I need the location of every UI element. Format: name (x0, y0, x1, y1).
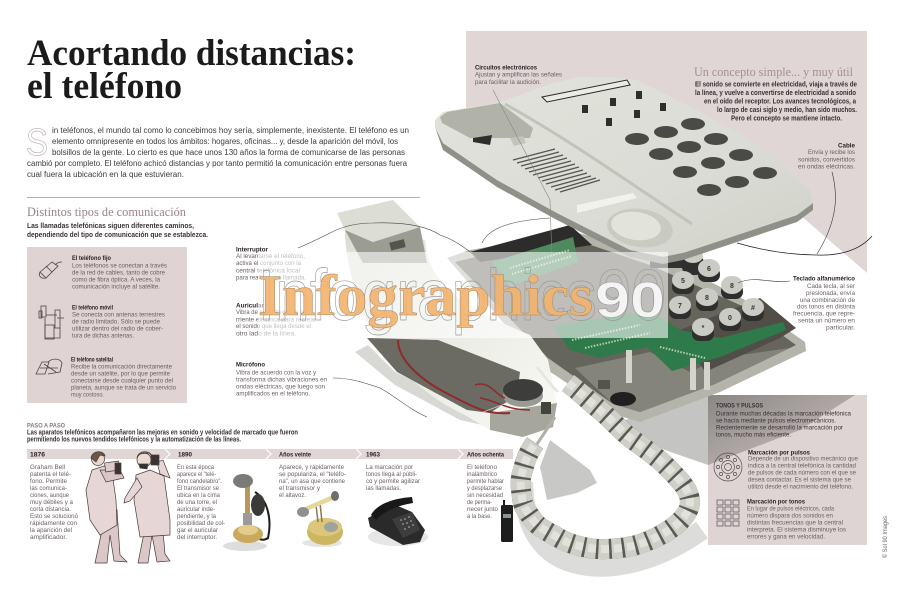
callout: circuitos electrónicos: para facilitar la audición. (475, 79, 541, 86)
text: 1876: fono. Permite (30, 478, 67, 485)
top shell (435, 77, 813, 264)
coiled cord (521, 383, 690, 549)
text: tone dialing: errores y gana en velocidad. (747, 534, 825, 540)
intro text block (26, 122, 409, 179)
text: satellite phone: muy costoso. (71, 392, 104, 398)
text: simple concept: la línea, y vuelve a convertirse de electricidad a sonido (695, 90, 856, 97)
callout: auricular (236, 302, 316, 338)
keypad buttons: 8 (730, 283, 734, 290)
text: landline: Los teléfonos se conectan a través (72, 262, 167, 270)
label strip (577, 193, 637, 213)
keypad buttons: 8 (705, 295, 709, 302)
callout: auricular: rriente eléctrica para recrear (236, 316, 316, 324)
icon: rotary dial (714, 453, 742, 481)
text: satellite phone: Recibe la comunicación directamente (71, 364, 172, 370)
intro text block: elemento omnipresente en todos los ámbitos: hogares, oficinas... y, desde la aparición del móvil, los (52, 137, 398, 146)
illustration: exploded telephone (337, 77, 813, 567)
man right (124, 452, 170, 563)
title: el teléfono (27, 65, 182, 106)
text: mobile: utilizar dentro del radio de cober- (72, 326, 163, 332)
text: landline: El teléfono fijo (72, 255, 111, 262)
callout: micrófono: Vibra de acuerdo con la voz y (236, 370, 317, 376)
text: satellite phone: conectarse desde cualquier punto del (71, 378, 173, 384)
callout: interruptor: Interruptor (236, 246, 268, 254)
ground shadows (355, 345, 708, 567)
callout: circuitos electrónicos: Circuitos electrónicos (475, 64, 537, 72)
callout: micrófono: amplificados en el teléfono. (236, 390, 310, 398)
function buttons (582, 91, 666, 126)
callout: teclado alfanumérico: Teclado alfanumérico (793, 276, 855, 282)
callout: teclado alfanumérico: senta un número en (798, 318, 856, 324)
illustration: 1920s telephone (297, 491, 343, 547)
callout: cable: en ondas eléctricas. (798, 164, 855, 170)
text: mobile: tura de dichas antenas. (72, 332, 134, 340)
text: tones and pulses: Recientemente se desarrolló la marcación por (716, 424, 843, 432)
subheading: types of communication: dependiendo del tipo de comunicación que se establezca. (27, 232, 208, 239)
text: 1963: La marcación por (366, 464, 413, 471)
watermark: Infographics (258, 263, 593, 328)
base tray (447, 225, 806, 422)
support column (650, 250, 695, 268)
intro text block: in teléfonos, el mundo tal como lo concebimos hoy sería, simplemente, inexistente. El teléfono es un (52, 126, 409, 135)
callout: circuitos electrónicos: Ajustan y amplifican las señales (475, 72, 562, 78)
text: 1876: la aparición del (30, 527, 72, 534)
dial keys (625, 118, 777, 196)
text: años ochenta: necer junto (467, 506, 498, 513)
speaker grille (513, 149, 600, 192)
text: landline (72, 255, 167, 290)
text: mobile (72, 304, 165, 340)
text: pulse dialing: de pulsos de cada número con el que se (748, 470, 856, 476)
text: 1890 (177, 464, 225, 541)
keypad buttons: * (702, 325, 705, 332)
callout: micrófono: Micrófono (236, 362, 265, 368)
callout: teclado alfanumérico: presionada, envía (806, 290, 855, 297)
text: 1876: las comunica- (30, 485, 67, 492)
text: landline: como de fibra óptica. A veces, la (72, 276, 160, 284)
handle button (605, 205, 675, 251)
callout: teclado alfanumérico: frecuencia, que repre- (793, 310, 855, 318)
microphone capsule (475, 367, 558, 414)
callout: teclado alfanumérico: una combinación de (800, 297, 855, 304)
text: simple concept: en el oído del receptor. Los avances tecnológicos, a (704, 98, 856, 106)
text: simple concept: Pero el concepto se mantiene intacto. (731, 116, 842, 122)
credit: © Sol 90 Images (882, 516, 889, 558)
text: pulse dialing: Depende de un dispositivo mecánico que (748, 456, 858, 462)
timeline band (27, 449, 513, 459)
callout: interruptor: central telefónica local (236, 268, 300, 274)
text: satellite phone: desde un satélite, por lo que permite (71, 370, 170, 378)
text: tones and pulses: se hacía mediante pulsos electromecánicos. (716, 418, 836, 424)
callout: interruptor: para realizar una llamada. (236, 274, 306, 282)
callout: teclado alfanumérico: Cada tecla, al ser (807, 283, 855, 290)
text: 1890: ubica en la cima (177, 492, 220, 499)
text: años veinte (279, 464, 346, 499)
timeline band: Años ochenta (467, 452, 504, 458)
text: 1963: tonos llega al públi- (366, 471, 417, 478)
text: 1876: muy débiles y a (30, 499, 73, 506)
keypad buttons (669, 249, 764, 341)
leader lines (298, 90, 872, 417)
text: 1876: patenta el telé- (30, 471, 71, 478)
callout: teclado alfanumérico: dos tonos en distinta (797, 304, 855, 310)
text: años ochenta: El teléfono (467, 464, 497, 471)
man left (86, 452, 127, 563)
text: 1876: ciones, aunque (30, 492, 69, 499)
callout: interruptor: Al levantarse el teléfono, (236, 253, 305, 260)
heading: types of communication: Distintos tipos de comunicación (27, 205, 187, 219)
text: mobile: Se conecta con antenas terrestres (72, 312, 165, 318)
text: 1876: rápidamente con (30, 520, 77, 527)
step by step intro: permitiendo los nuevos tendidos telefónicos y la automatización de las líneas. (27, 436, 241, 444)
step by step intro: PASO A PASO (27, 422, 65, 430)
text: mobile: El teléfono móvil (72, 304, 113, 312)
keypad buttons: 7 (678, 303, 682, 310)
title (27, 32, 356, 106)
text: 1876: Esto se solucionó (30, 513, 78, 520)
text: 1876: corta distancia. (30, 506, 71, 513)
callout: cable: Cable (838, 142, 855, 150)
text: tone dialing (747, 498, 846, 540)
text: 1963: las llamadas. (366, 485, 401, 492)
text: pulse dialing: Marcación por pulsos (748, 450, 810, 456)
text: años ochenta: a la base. (467, 513, 492, 520)
text: años ochenta: sin necesidad (467, 492, 503, 499)
keypad buttons: # (751, 305, 755, 312)
text: años veinte: na", un asa que contiene (279, 478, 345, 485)
keypad buttons: 6 (707, 266, 711, 273)
text: 1890: de una torre, el (177, 499, 217, 506)
text: tone dialing: Marcación por tonos (747, 498, 805, 506)
timeline band: 1876 (30, 452, 45, 458)
text: 1890: auricular inde- (177, 506, 215, 513)
illustration: two men with early telephones (86, 452, 170, 563)
watermark: 90 (595, 272, 665, 328)
icon: satellite phone (36, 359, 62, 374)
icon: mobile (39, 306, 64, 339)
text: 1876: amplificador. (30, 534, 67, 541)
subheading: types of communication: Las llamadas telefónicas siguen diferentes caminos, (27, 223, 194, 230)
text: 1890: aparece el "telé- (177, 471, 216, 478)
text: 1890: gar el auricular (177, 527, 218, 534)
text: satellite phone (71, 356, 176, 398)
callout: teclado alfanumérico (793, 276, 856, 332)
text: años ochenta: de perma- (467, 499, 492, 506)
display (542, 80, 630, 102)
callout: micrófono (236, 362, 327, 398)
text: 1876 (30, 464, 78, 541)
illustration: candlestick telephone (223, 474, 269, 551)
panel: communication types (27, 247, 187, 403)
text: tone dialing: En lugar de pulsos eléctricos, cada (747, 506, 834, 512)
text: tone dialing: número dispara dos sonidos en (747, 512, 833, 520)
text: 1890: del interruptor. (177, 534, 217, 541)
shell top face (435, 77, 813, 257)
callout: micrófono: ondas eléctricas, que luego son (236, 384, 325, 390)
text: mobile: de radio limitado. Sólo se puede (72, 318, 160, 326)
text: años veinte: se populariza, el "teléfo- (279, 471, 346, 478)
text: años veinte: Aparece, y rápidamente (279, 464, 344, 471)
watermark: Infographics90 (258, 256, 666, 336)
text: años veinte: el transmisor y (279, 485, 321, 492)
callout: interruptor: activa el conjunto con la (236, 260, 301, 267)
callout: circuitos electrónicos (475, 64, 562, 86)
text: años ochenta: inalámbrico (467, 471, 497, 478)
panel: concept background (466, 31, 867, 273)
illustration: cordless handset (501, 500, 513, 542)
title: Acortando distancias: (27, 32, 356, 73)
text: pulse dialing: desea contactar. Es el sistema que se (748, 476, 851, 484)
icon: landline (39, 262, 62, 278)
text: satellite phone: planeta, aunque se trata de un servicio (71, 384, 176, 392)
text: tones and pulses (716, 402, 851, 438)
callout: auricular: Auricular (236, 302, 264, 310)
callout: auricular: el sonido que llega desde el (236, 323, 311, 330)
text: 1890: pendiente, y la (177, 513, 216, 520)
keypad buttons: 5 (681, 278, 685, 285)
timeline band: Años veinte (279, 452, 311, 458)
keypad buttons: 0 (728, 315, 732, 322)
text: simple concept (695, 82, 857, 122)
text: 1890: fono candelabro". (177, 478, 222, 485)
text: pulse dialing (748, 450, 858, 490)
intro text block: bolsillos de la gente. Lo cierto es que hace unos 130 años la forma de comunicarse de las personas (52, 148, 405, 157)
text: simple concept: lo largo de casi siglo y medio, han sido muchos. (717, 107, 857, 114)
text: años veinte: el altavoz. (279, 492, 306, 499)
text: 1876: Graham Bell (30, 464, 65, 471)
text: satellite phone: El teléfono satelital (71, 356, 113, 364)
text: tone dialing: interpreta. El sistema disminuye los (747, 526, 846, 534)
callout: interruptor (236, 246, 306, 282)
heading: simple concept: Un concepto simple... y muy útil (694, 64, 853, 79)
text: años ochenta: permite hablar (467, 478, 504, 485)
intro text block: cambió por completo. El teléfono achicó distancias y por tanto permitió la comunicación entre personas fuera (27, 159, 408, 168)
text: años ochenta (467, 464, 504, 520)
callout: auricular: Vibra de acuerdo con la co- (236, 309, 308, 316)
text: landline: comunicación incluye al satélite. (72, 284, 160, 290)
panel: tones and pulses background (708, 395, 867, 545)
handset (337, 200, 557, 437)
callout: cable: Envía y recibe los (808, 149, 855, 156)
step by step intro (27, 422, 298, 444)
timeline band: 1890 (178, 452, 192, 458)
timeline band: 1963 (366, 452, 380, 458)
text: pulse dialing: utilizó desde el nacimiento del teléfono. (748, 484, 853, 490)
text: pulse dialing: indica a la central telefónica la cantidad (748, 462, 856, 470)
text: tones and pulses: Durante muchas décadas la marcación telefónica (716, 410, 851, 418)
text: 1963 (366, 464, 420, 492)
callout: teclado alfanumérico: particular. (826, 324, 855, 332)
text: tones and pulses: TONOS Y PULSOS (716, 402, 763, 410)
circuit boards (492, 237, 786, 371)
support posts (626, 350, 710, 390)
callout: auricular: otro lado de la línea. (236, 330, 296, 338)
callout: micrófono: transforma dichas vibraciones en (236, 376, 327, 384)
icon: keypad (717, 500, 739, 526)
illustration: 1963 push-button telephone (368, 497, 428, 546)
subheading: types of communication (27, 223, 208, 239)
intro text block: cual fuera la ubicación en la que estuvieran. (27, 170, 184, 179)
text: landline: de la red de cables, tanto de cobre (72, 270, 165, 276)
callout: cable (798, 142, 855, 170)
text: tones and pulses: tonos, mucho más eficiente. (716, 432, 791, 438)
text: 1890: En esta época (177, 464, 214, 471)
text: 1963: co y permite agilizar (366, 478, 420, 485)
shell rim (435, 127, 813, 264)
text: tone dialing: distintas frecuencias que la central (747, 520, 843, 526)
drop cap: S (26, 122, 48, 164)
text: años ochenta: y desplazarse (467, 485, 502, 492)
callout: cable: sonidos, convertidos (798, 156, 855, 164)
step by step intro: Las aparatos telefónicos acompañaron las mejoras en sonido y velocidad de marcado que fueron (27, 430, 298, 436)
text: 1890: El transmisor se (177, 485, 219, 492)
text: simple concept: El sonido se convierte en electricidad, viaja a través de (695, 82, 857, 88)
text: 1890: posibilidad de col- (177, 520, 225, 527)
